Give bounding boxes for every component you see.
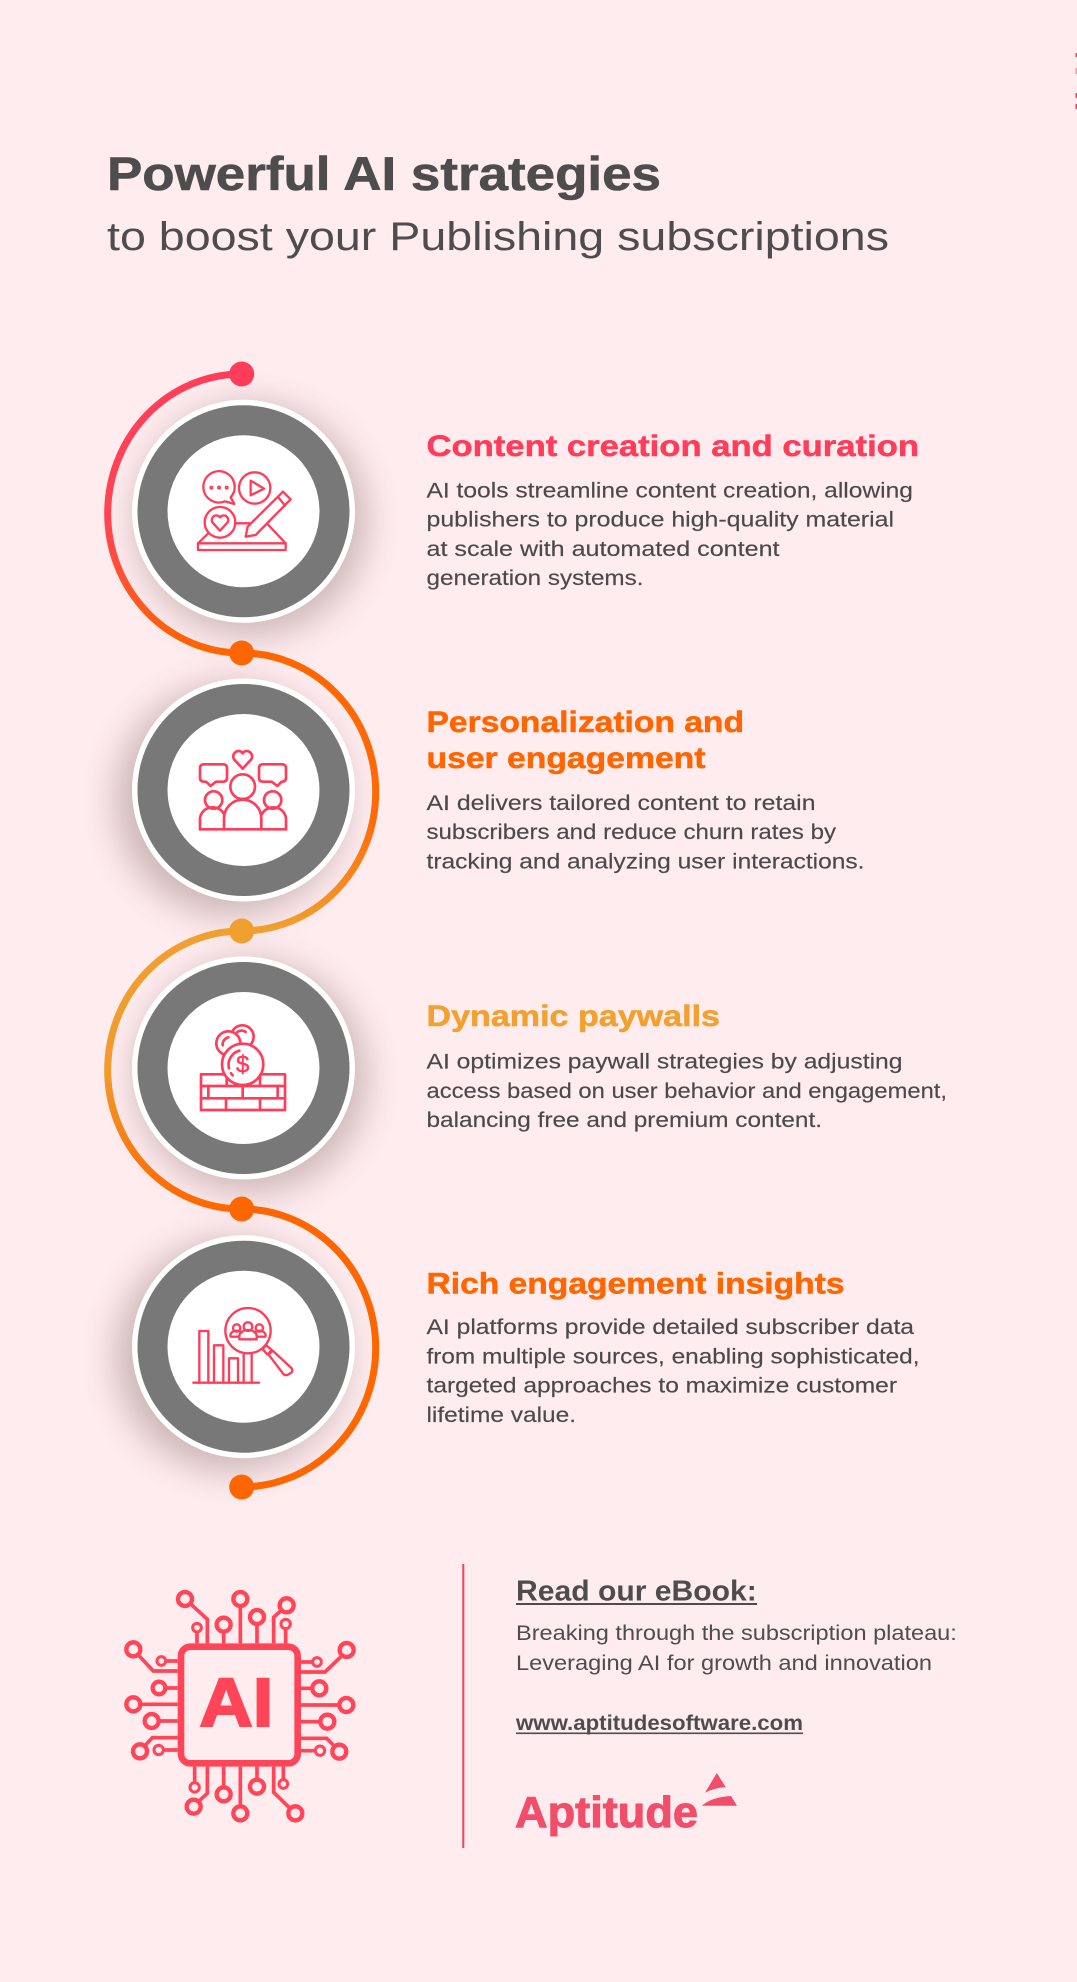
logo: Aptitude: Aptitude: [515, 1788, 698, 1837]
shadows behind circles: [115, 404, 367, 1472]
heading: user engagement: [426, 742, 706, 775]
heading: Read our eBook: Read our eBook:: [516, 1576, 757, 1608]
call to action: eBook: [515, 1576, 957, 1735]
panel: step 1 circle: [132, 400, 355, 623]
body: at scale with automated content: [426, 538, 780, 561]
heading: Content creation and curation: [426, 430, 919, 463]
heading: Powerful AI strategies: Powerful AI strategies: [107, 147, 661, 200]
panel: step 3 circle: [132, 956, 355, 1180]
heading: [426, 706, 744, 775]
heading: Rich engagement insights: [426, 1267, 844, 1300]
icon: insights: [193, 1308, 292, 1383]
body: lifetime value.: [426, 1404, 576, 1427]
body: tracking and analyzing user interactions.: [426, 851, 864, 874]
body: targeted approaches to maximize customer: [426, 1375, 897, 1398]
body: AI delivers tailored content to retain: [426, 792, 816, 815]
subheading: to boost your Publishing subscriptions: [107, 215, 889, 259]
arc 2: [242, 653, 376, 931]
text block: Content creation and curation: [426, 430, 919, 590]
title: [107, 147, 889, 259]
icon: AI chip: AI: [199, 1665, 273, 1741]
text block: Personalization and user engagement: [426, 706, 864, 874]
arc 3: [108, 931, 242, 1209]
icon: paywall: $: [236, 1052, 249, 1079]
body: [426, 1050, 947, 1132]
arc 4: [242, 1209, 376, 1487]
eBook description: [516, 1622, 957, 1675]
panel: step 4 circle: [132, 1235, 355, 1458]
body: [426, 792, 864, 874]
icon: AI chip: [126, 1592, 354, 1820]
logo: Aptitude: [515, 1773, 737, 1837]
text block: Rich engagement insights: [426, 1267, 920, 1427]
body: generation systems.: [426, 567, 644, 590]
body: access based on user behavior and engagement,: [426, 1080, 947, 1103]
icon: user engagement: [200, 751, 286, 829]
body: subscribers and reduce churn rates by: [426, 821, 837, 844]
body: AI optimizes paywall strategies by adjusting: [426, 1050, 902, 1073]
eBook description: Breaking through the subscription plateau:: [516, 1622, 957, 1645]
body: [426, 479, 913, 590]
body: balancing free and premium content.: [426, 1109, 822, 1132]
body: from multiple sources, enabling sophisticated,: [426, 1345, 920, 1368]
icon: paywall: [201, 1025, 285, 1110]
website link: www.aptitudesoftware.com: [515, 1712, 803, 1735]
icon: content creation: [198, 471, 291, 550]
panel: step 2 circle: [132, 678, 355, 902]
timeline dots: [229, 362, 254, 1500]
text block: Dynamic paywalls: [426, 1000, 947, 1132]
body: publishers to produce high-quality material: [426, 509, 894, 532]
body: AI tools streamline content creation, allowing: [426, 479, 913, 502]
heading: Personalization and: [426, 706, 744, 739]
arc 1: [108, 374, 242, 653]
heading: Dynamic paywalls: [426, 1000, 720, 1033]
eBook description: Leveraging AI for growth and innovation: [516, 1652, 932, 1675]
body: AI platforms provide detailed subscriber data: [426, 1316, 914, 1339]
body: [426, 1316, 920, 1427]
timeline connector arcs: [108, 374, 376, 1487]
